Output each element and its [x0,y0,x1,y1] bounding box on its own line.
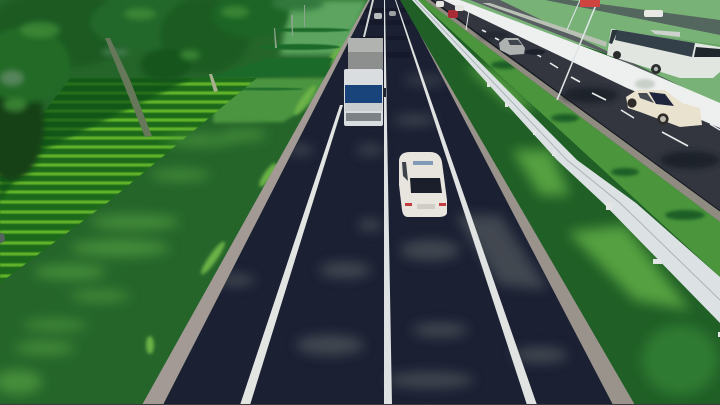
tree trunks [105,38,152,137]
asphalt [163,0,613,405]
panel: far background and service road [440,0,720,130]
stone at lawn edge [0,233,5,243]
left gravel shoulder [142,0,370,405]
striped lawn [0,78,257,283]
right gravel shoulder [400,0,635,405]
panel: right carriageway [425,0,720,222]
panel: left grass verge [0,0,370,405]
panel: far tree canopy [0,0,324,243]
rear window [410,178,442,193]
panel: right grass median [400,0,720,405]
tree foliage [0,0,324,180]
cargo box [348,38,383,69]
white sedan on right road [626,90,702,127]
bus [607,29,720,78]
tail lights [405,203,412,206]
sunroof [413,161,433,165]
centre lane line [384,0,392,405]
distant band shadows [360,8,410,58]
tree shadow across lawn [0,78,193,200]
windshield [345,85,382,103]
guardrail posts [487,83,720,337]
guardrail [412,0,720,337]
grey car on right road [499,38,545,55]
light poles [466,0,598,100]
service road [470,0,720,130]
asphalt light patches and tree shadows [215,76,568,388]
sunlit grass [465,65,690,310]
truck [341,38,386,126]
upper grass band [213,78,345,123]
dashed lane marks [482,30,688,146]
bottom edge strip [0,404,720,405]
shadow bands on upper grass [205,28,350,90]
distant vehicles [374,0,663,19]
left lane line [240,105,343,405]
right lane line [395,0,537,405]
panel: main road [142,0,635,405]
far strip beyond guardrail [418,0,720,277]
gravel edge [425,0,720,222]
white concrete barrier wall [443,0,720,128]
bus wheels [613,51,621,59]
sunlit patches on lower grass [0,130,267,394]
white car in foreground [399,152,447,217]
cab [344,69,383,126]
